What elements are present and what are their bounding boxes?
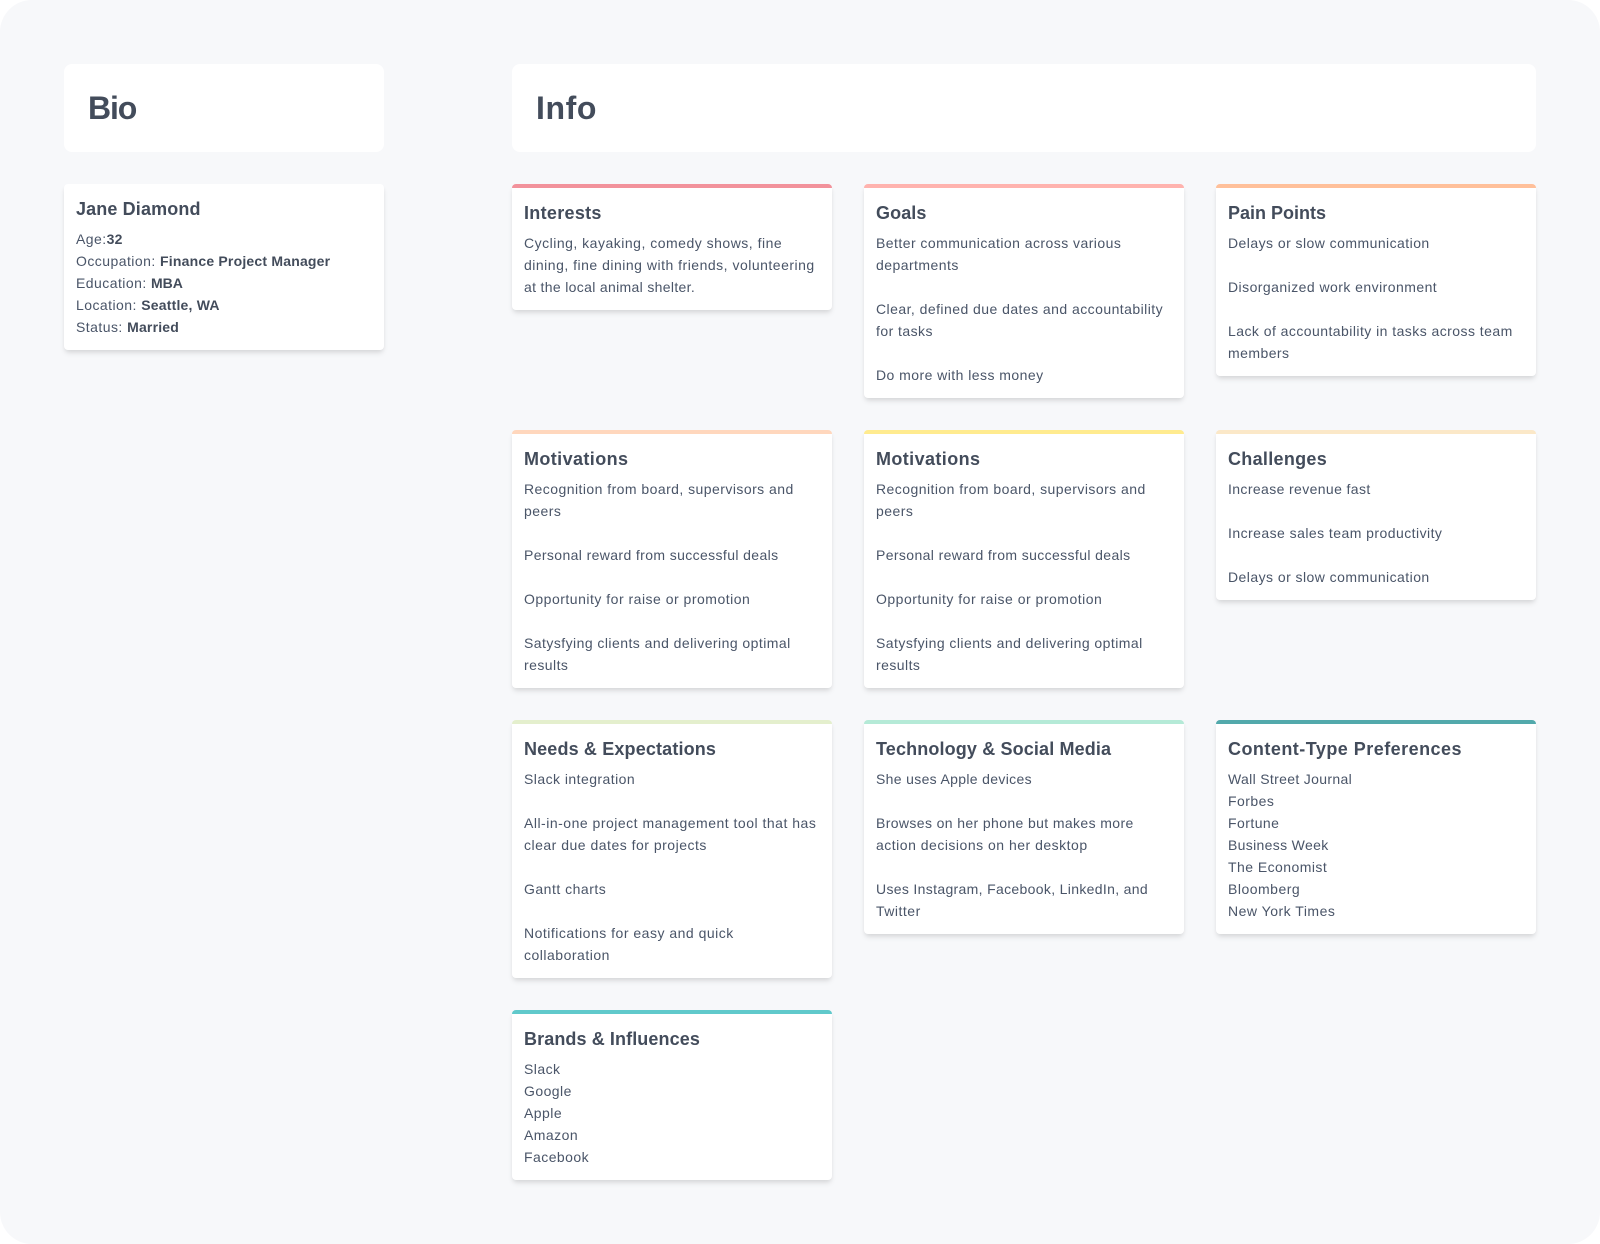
panel: Pain Points [1216,184,1536,376]
panel: Content-Type Preferences [1216,720,1536,934]
panel: Goals [864,184,1184,398]
text block: Motivations: Recognition from board, supervisors and peers Personal reward from successful deals Opportunity for raise or promotion Satysfying clients and delivering optimal results [876,481,1146,673]
heading: Motivations: Motivations [524,449,628,469]
panel: Brands & Influences [512,1010,832,1180]
panel: Motivations (first) [512,430,832,688]
panel header: Info [512,64,1536,152]
text block: Needs & Expectations: Slack integration All-in-one project management tool that has clear due dates for projects Gantt charts Notifications for easy and quick collaboration [524,771,816,963]
heading: Interests: Interests [524,203,602,223]
text block: Content-Type Preferences: Wall Street Journal Forbes Fortune Business Week The Economist Bloomberg New York Times [1228,771,1352,919]
heading: Pain Points: Pain Points [1228,203,1326,223]
heading: Goals: Goals [876,203,927,223]
heading: Needs & Expectations: Needs & Expectations [524,739,716,759]
panel header: Bio: Bio [88,90,136,126]
text block: Goals: Better communication across various departments Clear, defined due dates and accountability for tasks Do more with less money [876,235,1163,383]
panel: Technology & Social Media [864,720,1184,934]
panel header: Bio [64,64,384,152]
text block: Pain Points: Delays or slow communication Disorganized work environment Lack of accountability in tasks across team members [1228,235,1513,361]
text block: Challenges: Increase revenue fast Increase sales team productivity Delays or slow communication [1228,481,1442,585]
heading: Brands & Influences: Brands & Influences [524,1029,700,1049]
text block: Technology & Social Media: She uses Apple devices Browses on her phone but makes more action decisions on her desktop Uses Instagram, Facebook, LinkedIn, and Twitter [876,771,1148,919]
panel: Needs & Expectations [512,720,832,978]
heading: Technology & Social Media: Technology & Social Media [876,739,1111,759]
panel: Challenges [1216,430,1536,600]
panel: Interests [512,184,832,310]
text block: Interests: Cycling, kayaking, comedy shows, fine dining, fine dining with friends, volunteering at the local animal shelter. [524,235,815,295]
heading: Content-Type Preferences: Content-Type Preferences [1228,739,1462,759]
text block: Brands & Influences: Slack Google Apple Amazon Facebook [524,1061,589,1165]
panel: bio card Jane Diamond [64,184,384,350]
panel header: Info: Info [536,90,597,126]
heading: Challenges: Challenges [1228,449,1327,469]
heading: name: Jane Diamond [76,199,201,219]
text block: bio details: Age:32 Occupation: Finance Project Manager Education: MBA Location: Seattle, WA Status: Married [76,231,330,335]
panel: Motivations (second) [864,430,1184,688]
text block: Motivations: Recognition from board, supervisors and peers Personal reward from successful deals Opportunity for raise or promotion Satysfying clients and delivering optimal results [524,481,794,673]
heading: Motivations: Motivations [876,449,980,469]
